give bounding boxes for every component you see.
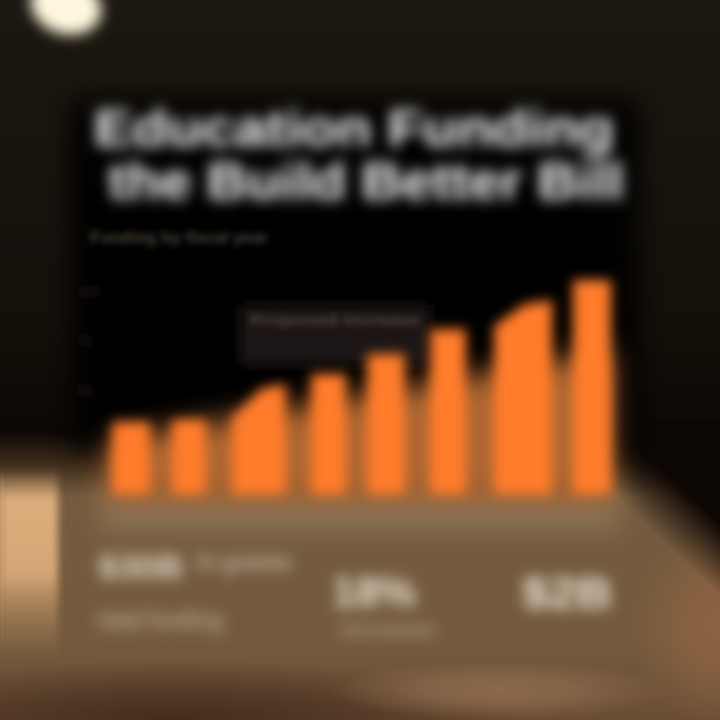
stat block: left text: in grants <box>196 549 292 576</box>
icon: ceiling lamp glow <box>23 0 109 44</box>
title: Education Funding <box>94 100 614 158</box>
panel: lower table surface <box>0 420 720 720</box>
stat block: middle <box>332 568 435 641</box>
chart callout: Proposed increase <box>250 312 420 329</box>
title: the Build Better Bill <box>108 153 624 211</box>
stat block: left text: $30B <box>98 549 183 585</box>
bar chart: funding by year <box>108 280 612 500</box>
stat block: middle: 18% <box>332 568 416 615</box>
chart axis labels: 100 <box>78 284 100 299</box>
stat block: left text <box>98 549 292 634</box>
bar chart glow <box>108 350 612 500</box>
title <box>94 100 624 211</box>
stat block: middle: increase <box>340 619 435 641</box>
chart axis labels: 50 <box>78 384 92 399</box>
chart callout <box>240 305 430 365</box>
subtitle: Funding by fiscal year <box>90 228 268 247</box>
stat block: left text: total funding <box>98 604 223 634</box>
panel: dark board <box>72 100 638 450</box>
bars <box>112 280 611 494</box>
chart axis labels <box>78 284 100 399</box>
chart axis labels: 75 <box>78 334 92 349</box>
stat block: right: $2B <box>522 569 612 618</box>
